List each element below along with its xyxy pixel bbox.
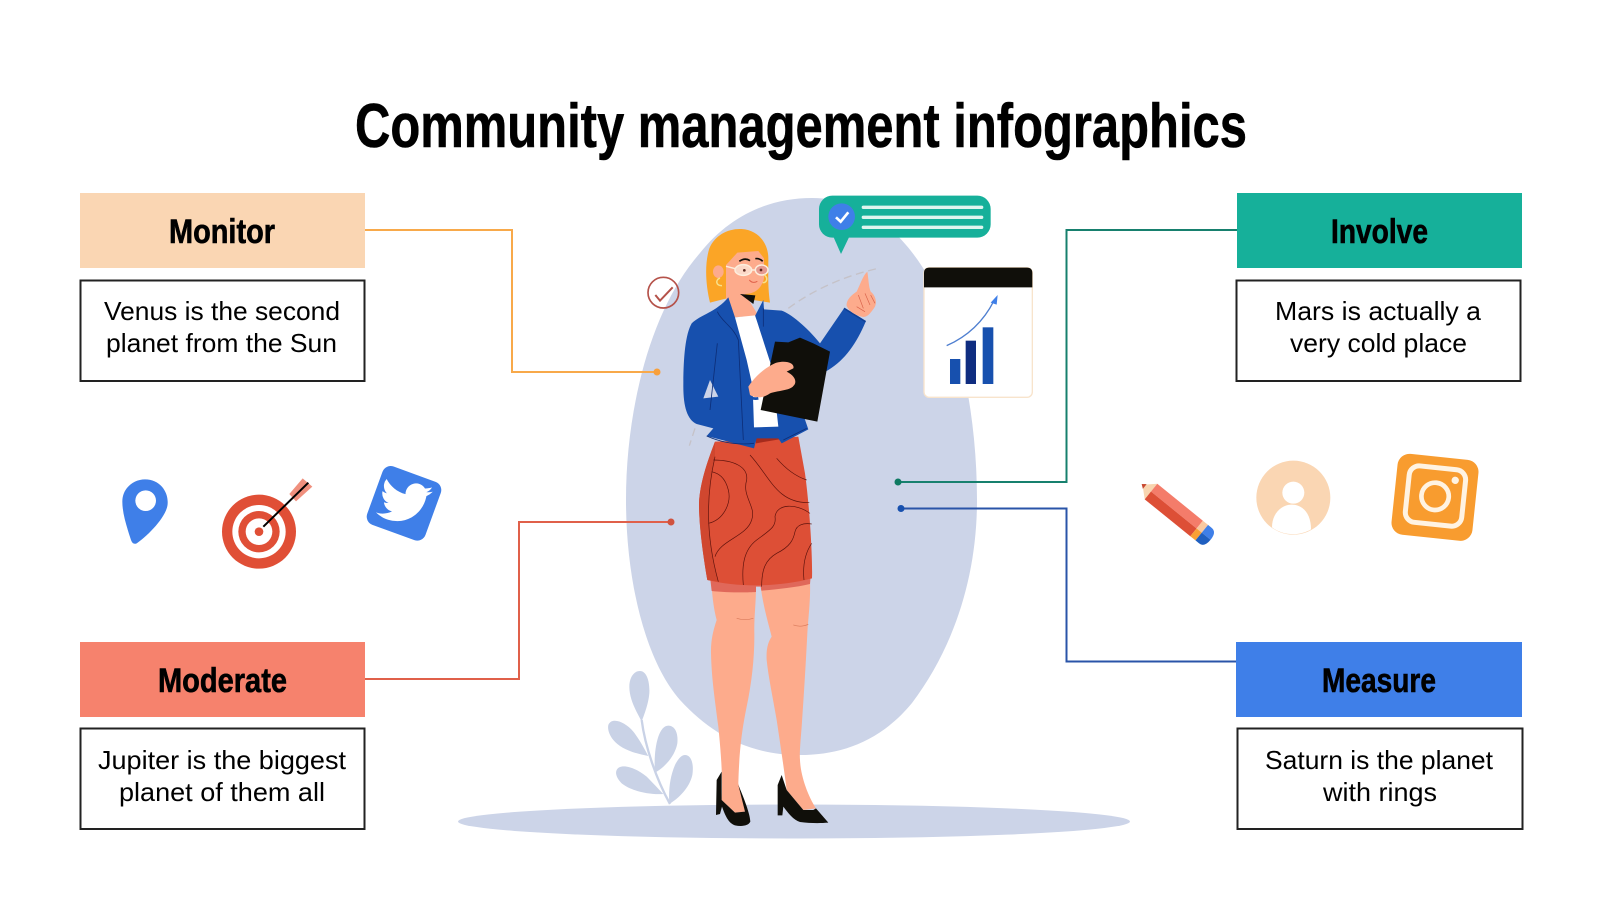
plant [608, 671, 693, 804]
upper body [683, 272, 876, 448]
monitor text: Venus is the second [104, 296, 340, 326]
monitor heading: Monitor [169, 213, 275, 251]
involve text: Mars is actually a [1275, 296, 1482, 326]
connector: involve [894, 230, 1237, 486]
moderate heading [80, 642, 365, 717]
panel: moderate [80, 642, 365, 829]
title: Community management infographics [355, 92, 1247, 161]
woman illustration [683, 229, 878, 826]
legs and shoes [711, 582, 828, 826]
ground shadow [458, 804, 1130, 838]
icon: check circle [648, 277, 679, 308]
background blob [626, 198, 977, 755]
connector: measure [898, 505, 1236, 662]
involve text [1236, 280, 1520, 381]
moderate text: planet of them all [119, 777, 325, 807]
dashed gesture lines [689, 268, 878, 446]
head [706, 229, 770, 320]
involve text: very cold place [1290, 328, 1467, 358]
measure text: with rings [1322, 777, 1437, 807]
panel: involve [1236, 193, 1522, 381]
monitor text [80, 280, 364, 381]
measure heading [1236, 642, 1522, 717]
moderate text [80, 728, 364, 829]
measure text [1238, 728, 1522, 829]
icon: location pin [122, 479, 168, 544]
icon: instagram [1390, 453, 1480, 542]
monitor text: planet from the Sun [106, 328, 337, 358]
skirt [699, 437, 812, 592]
monitor heading [80, 193, 365, 268]
connector: moderate [365, 518, 674, 679]
icon: user avatar [1256, 461, 1330, 535]
icon: target with arrow [222, 478, 312, 569]
measure text: Saturn is the planet [1265, 745, 1494, 775]
involve heading [1237, 193, 1522, 268]
moderate heading: Moderate [158, 662, 287, 700]
panel: measure [1236, 642, 1522, 829]
measure heading: Measure [1322, 662, 1436, 700]
involve heading: Involve [1331, 213, 1428, 251]
moderate text: Jupiter is the biggest [98, 745, 347, 775]
panel: monitor [80, 193, 365, 381]
speech bubble [819, 196, 991, 254]
icon: pencil [1135, 476, 1217, 548]
connector: monitor [365, 230, 660, 376]
icon: twitter [364, 464, 444, 543]
chart card [924, 268, 1032, 397]
